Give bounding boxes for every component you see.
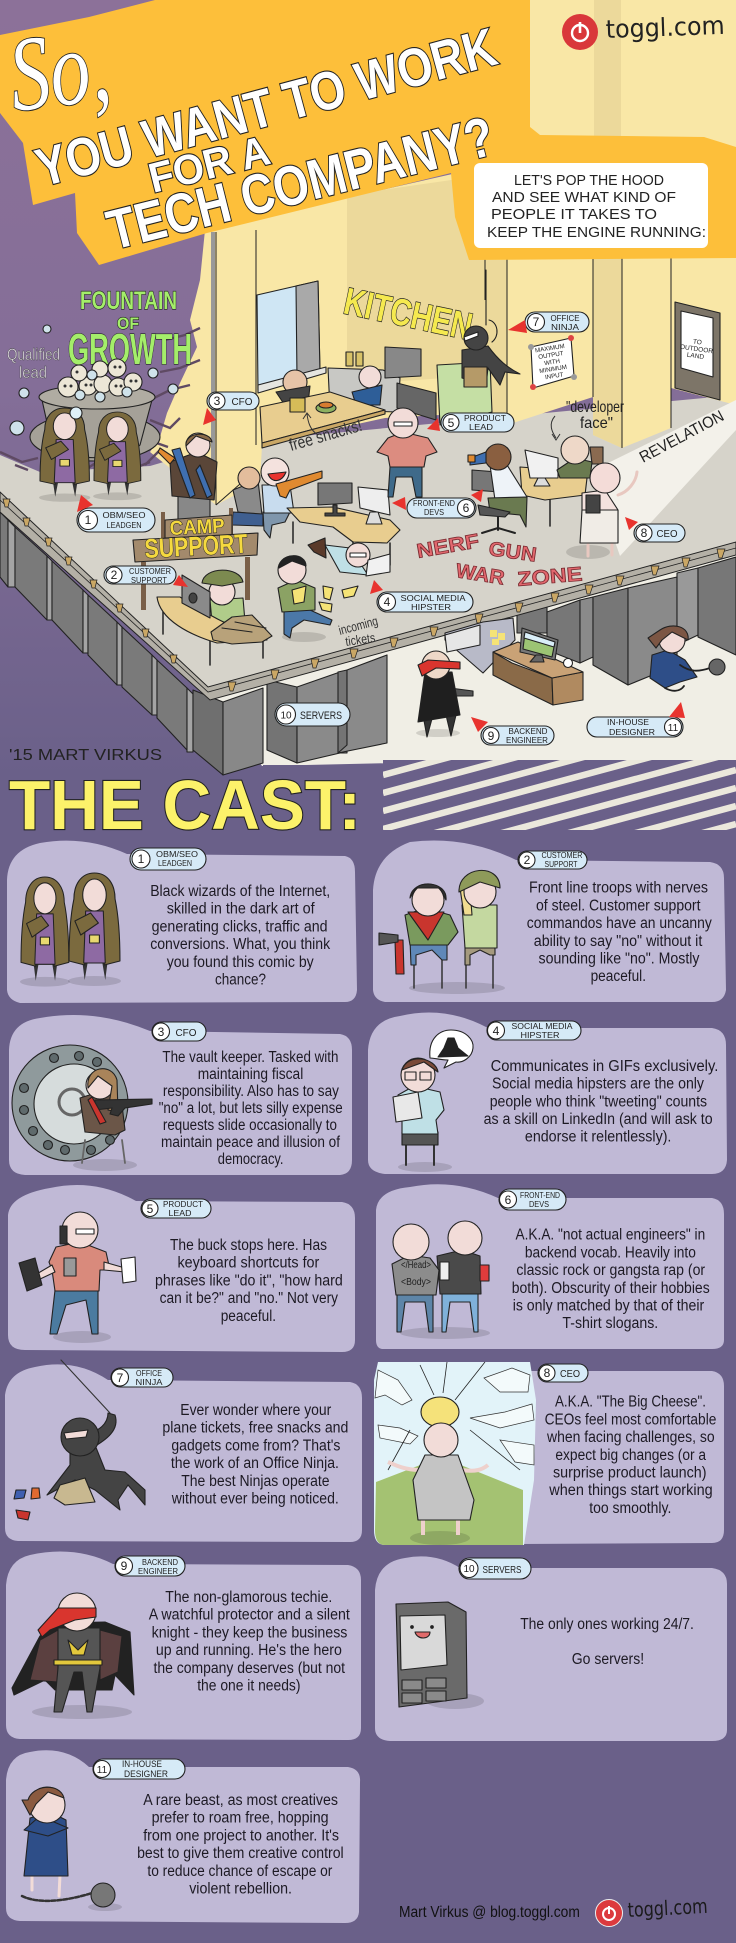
toggl logo bottom: toggl.com <box>627 1894 708 1922</box>
title: tech company: TECH COMPANY? <box>101 104 500 262</box>
text: skilled in the dark art of <box>167 901 315 918</box>
arrow <box>77 495 93 512</box>
panel: in-house designer <box>6 1750 360 1923</box>
product lead character <box>19 1212 136 1343</box>
text: Black wizards of the Internet, <box>150 883 330 900</box>
panel: CEO <box>374 1362 724 1545</box>
wizards <box>20 873 121 987</box>
support characters <box>379 870 505 994</box>
label: 11 <box>97 1765 108 1776</box>
dev characters: <Body> <box>401 1277 431 1288</box>
panel: social media hipster <box>368 1012 727 1174</box>
text: requests slide occasionally to <box>163 1117 337 1134</box>
label: CFO <box>176 1027 196 1039</box>
text: The vault keeper. Tasked with <box>162 1049 338 1066</box>
designer label: 11 <box>668 723 679 734</box>
designer label <box>587 717 683 737</box>
text: can it be?" and "no." Not very <box>160 1290 338 1307</box>
nerf gun war zone: ZONE <box>517 563 583 591</box>
kitchen counter and appliances <box>328 347 492 425</box>
fountain of growth heading <box>68 287 192 374</box>
text: The buck stops here. Has <box>170 1237 327 1254</box>
panel: backend engineer <box>6 1552 361 1740</box>
label <box>141 1199 211 1218</box>
text: The best Ninjas operate <box>181 1473 330 1490</box>
server racks right <box>517 557 736 685</box>
text: The non-glamorous techie. <box>165 1589 332 1606</box>
developer face note <box>551 399 625 440</box>
intro text box: AND SEE WHAT KIND OF <box>492 190 676 206</box>
CEO picture <box>374 1362 536 1545</box>
text: expect big changes (or a <box>555 1447 706 1464</box>
kitchen table with snacks <box>260 366 385 448</box>
qualified lead note: Qualified <box>7 345 60 364</box>
arrow <box>203 408 216 425</box>
label <box>115 1556 185 1576</box>
hipster character <box>393 1030 473 1172</box>
text: maintaining fiscal <box>198 1066 303 1083</box>
motivational sign <box>528 335 577 390</box>
servers label <box>275 703 350 726</box>
label <box>518 851 587 869</box>
ninja character <box>14 1360 145 1520</box>
motivational sign: MAXIMUM <box>535 343 565 354</box>
label: 10 <box>463 1564 475 1575</box>
nerf gun war zone: GUN <box>487 538 538 567</box>
customer support label: CUSTOMER <box>129 566 171 576</box>
label: SUPPORT <box>544 860 578 869</box>
label <box>111 1368 173 1387</box>
text: is only matched by that of their <box>513 1298 704 1314</box>
arrow <box>625 517 638 530</box>
label: OBM/SEO <box>156 849 198 859</box>
arrow <box>370 580 383 594</box>
arrow <box>392 497 406 510</box>
qualified lead note: lead <box>19 363 47 382</box>
text <box>159 1049 343 1168</box>
fountain <box>10 325 178 461</box>
label: DEVS <box>529 1200 549 1209</box>
customer support label <box>104 566 176 585</box>
label: 6 <box>505 1193 512 1207</box>
panel: product lead <box>8 1185 355 1352</box>
label: SERVERS <box>482 1564 522 1576</box>
label: 7 <box>117 1371 124 1385</box>
office ninja label: 7 <box>533 315 540 329</box>
server character <box>396 1602 484 1709</box>
free snacks note: free snacks! <box>287 416 364 455</box>
office ninja label: NINJA <box>551 322 579 332</box>
label <box>459 1558 531 1579</box>
credit: Mart Virkus @ blog.toggl.com <box>399 1904 580 1921</box>
toggl logo top <box>562 11 725 50</box>
developer face note: "developer <box>566 399 625 416</box>
office ninja label: OFFICE <box>550 313 580 323</box>
title <box>3 6 503 262</box>
designer label: IN-HOUSE <box>607 717 649 727</box>
text: knight - they keep the business <box>152 1624 348 1641</box>
text <box>150 883 330 988</box>
label: LEADGEN <box>158 858 192 868</box>
fountain of growth heading: OF <box>117 314 139 333</box>
door <box>675 302 720 400</box>
text: from one project to another. It's <box>143 1827 339 1844</box>
text: Communicates in GIFs exclusively. <box>491 1058 718 1075</box>
dev characters: </Head> <box>401 1260 431 1271</box>
designer character <box>22 1787 122 1911</box>
text: prefer to roam free, hopping <box>152 1810 329 1827</box>
label <box>538 1364 588 1382</box>
arrow <box>427 418 440 431</box>
panel: servers <box>375 1556 727 1741</box>
wall edge lines <box>213 230 671 505</box>
label: 2 <box>524 853 531 867</box>
servers label: 10 <box>280 710 292 722</box>
text: the work of an Office Ninja. <box>171 1455 339 1472</box>
text: surprise product launch) <box>553 1464 706 1482</box>
lower floor <box>207 548 736 766</box>
text: keyboard shortcuts for <box>178 1255 319 1272</box>
backend label: ENGINEER <box>506 735 548 745</box>
front-end label <box>407 498 476 518</box>
text <box>137 1792 344 1898</box>
wall <box>150 0 736 505</box>
door: OUTDOOR <box>679 344 714 355</box>
text: maintain peace and illusion of <box>161 1134 341 1151</box>
front-end label: FRONT-END <box>413 498 455 508</box>
label: IN-HOUSE <box>122 1759 162 1770</box>
label: OFFICE <box>136 1368 162 1378</box>
product lead label: PRODUCT <box>464 413 506 423</box>
title: So: So, <box>3 6 116 134</box>
CFO label <box>207 392 259 410</box>
qualified lead note <box>7 345 60 382</box>
label: SOCIAL MEDIA <box>512 1021 573 1031</box>
label: NINJA <box>136 1377 163 1387</box>
text: responsibility. Also has to say <box>163 1083 339 1100</box>
servers label: SERVERS <box>300 710 342 722</box>
developer face note: face" <box>580 415 613 432</box>
label: PRODUCT <box>163 1199 203 1209</box>
customer support label: 2 <box>111 568 118 582</box>
social media label: SOCIAL MEDIA <box>400 593 466 603</box>
platform edge <box>0 492 736 700</box>
tickets guy <box>278 556 358 642</box>
incoming tickets note: incoming <box>337 613 379 638</box>
camp support sign: CAMP <box>169 515 225 540</box>
motivational sign: MINIMUM <box>539 364 567 375</box>
office floor <box>0 395 736 687</box>
product lead label: 5 <box>448 416 455 430</box>
label: 4 <box>493 1024 500 1038</box>
label: BACKEND <box>142 1557 178 1567</box>
OBM label: 1 <box>85 513 92 527</box>
fountain of growth heading: GROWTH <box>68 325 192 374</box>
intro text box: KEEP THE ENGINE RUNNING: <box>487 225 706 241</box>
customer support label: SUPPORT <box>131 575 167 585</box>
text: Social media hipsters are the only <box>492 1076 704 1093</box>
vault with CFO <box>12 1045 152 1171</box>
arrow <box>471 717 488 732</box>
CFO scene <box>158 433 217 520</box>
camp support sign <box>133 508 258 610</box>
text: peaceful. <box>221 1308 276 1325</box>
panel: customer support <box>373 840 726 1002</box>
text: conversions. What, you think <box>150 936 330 953</box>
backend character <box>12 1593 134 1719</box>
motivational sign: WITH <box>544 358 560 367</box>
door: TO <box>692 338 702 347</box>
text: The only ones working 24/7. <box>520 1616 694 1633</box>
incoming tickets note <box>337 613 379 649</box>
text: T-shirt slogans. <box>562 1315 658 1332</box>
text: too smoothly. <box>589 1500 671 1517</box>
backend label <box>481 726 554 745</box>
backend label: 9 <box>488 729 495 743</box>
text: A watchful protector and a silent <box>149 1607 350 1624</box>
text: backend vocab. Heavily into <box>525 1244 696 1261</box>
text: the one it needs) <box>197 1678 300 1694</box>
front-end label: DEVS <box>424 507 444 517</box>
wall shading <box>347 0 622 448</box>
title banner <box>0 0 736 265</box>
text <box>484 1058 718 1146</box>
text: you found this comic by <box>167 954 314 971</box>
motivational sign: INPUT <box>545 371 564 381</box>
label: DESIGNER <box>124 1769 168 1780</box>
text: both). Obscurity of their hobbies <box>512 1280 710 1297</box>
text: democracy. <box>218 1151 284 1168</box>
text: to reduce chance of escape or <box>147 1863 332 1880</box>
CEO label <box>634 524 685 542</box>
label: CUSTOMER <box>542 851 583 860</box>
text <box>512 1227 710 1332</box>
designer with ball and chain <box>648 626 725 691</box>
text: without ever being noticed. <box>171 1490 339 1508</box>
text: classic rock or gangsta rap (or <box>516 1262 705 1279</box>
label <box>93 1759 185 1780</box>
signature: '15 MART VIRKUS <box>9 747 162 764</box>
title: for a: FOR A <box>144 126 275 202</box>
text: chance? <box>215 972 266 988</box>
text: A.K.A. "not actual engineers" in <box>516 1227 705 1244</box>
text: commandos have an uncanny <box>527 915 712 932</box>
incoming tickets note: tickets <box>344 630 377 649</box>
panel: office ninja <box>5 1360 362 1542</box>
label: HIPSTER <box>520 1030 560 1040</box>
text: as a skill on LinkedIn (and will ask to <box>484 1111 713 1128</box>
shooters <box>232 458 322 538</box>
label: 9 <box>121 1559 128 1573</box>
nerf gun war zone: NERF <box>415 530 481 563</box>
text: Front line troops with nerves <box>529 880 708 897</box>
camp support sign: SUPPORT <box>144 529 249 564</box>
label: 1 <box>138 852 145 866</box>
label <box>499 1189 566 1210</box>
nerf gun war zone: WAR <box>454 560 507 590</box>
text: violent rebellion. <box>189 1880 292 1898</box>
text: peaceful. <box>591 968 646 985</box>
text: best to give them creative control <box>137 1845 344 1862</box>
text: gadgets come from? That's <box>171 1437 341 1454</box>
label: 3 <box>158 1025 165 1039</box>
product lead <box>377 408 437 497</box>
text: A rare beast, as most creatives <box>143 1792 338 1809</box>
text: ability to say "no" without it <box>534 933 703 950</box>
intro text box: PEOPLE IT TAKES TO <box>491 207 657 223</box>
panel: OBM/SEO leadgen <box>7 841 357 1003</box>
product lead label: LEAD <box>469 422 493 432</box>
CEO scene <box>566 463 637 559</box>
OBM wizards <box>39 407 142 502</box>
label: 5 <box>147 1202 154 1216</box>
label <box>152 1022 206 1041</box>
toggl logo bottom <box>596 1894 708 1926</box>
OBM label: LEADGEN <box>106 520 142 530</box>
arrow <box>669 702 685 718</box>
intro text box <box>474 163 708 248</box>
text: sounding like "no". Mostly <box>538 950 700 968</box>
arrow <box>173 575 188 587</box>
backend engineer <box>416 651 473 737</box>
revelation beam <box>590 400 736 556</box>
CEO label: 8 <box>641 526 648 540</box>
OBM label <box>77 508 155 532</box>
text: phrases like "do it", "how hard <box>155 1272 343 1289</box>
intro text box: LET'S POP THE HOOD <box>514 173 664 189</box>
text: when things start working <box>548 1482 713 1499</box>
panel: CFO <box>9 1015 352 1175</box>
text: up and running. He's the hero <box>156 1642 342 1659</box>
text: when facing challenges, so <box>546 1429 715 1446</box>
label <box>130 848 206 870</box>
panel: front-end devs <box>376 1184 724 1349</box>
text: generating clicks, traffic and <box>152 918 328 935</box>
window <box>257 281 326 393</box>
social media label: 4 <box>384 595 391 609</box>
text <box>527 880 712 985</box>
text: people who think "tweeting" counts <box>490 1093 707 1110</box>
arrow <box>508 320 527 333</box>
fountain of growth heading: FOUNTAIN <box>80 287 177 315</box>
desk and computers <box>287 483 400 565</box>
hipster under desk <box>308 538 390 576</box>
text: plane tickets, free snacks and <box>162 1420 348 1437</box>
nerf gun war zone <box>415 530 583 591</box>
label <box>487 1021 581 1040</box>
text: "no" a lot, but lets silly expense <box>159 1100 343 1117</box>
motivational sign: OUTPUT <box>538 350 564 361</box>
OBM label: OBM/SEO <box>102 510 146 520</box>
designer label: DESIGNER <box>609 727 655 737</box>
text: of steel. Customer support <box>536 897 701 914</box>
label: FRONT-END <box>520 1191 560 1200</box>
backend label: BACKEND <box>508 726 548 736</box>
CEO label: CEO <box>656 528 678 540</box>
text: the company deserves (but not <box>154 1660 346 1677</box>
kitchen sign: KITCHEN <box>340 281 476 349</box>
server racks left <box>0 512 263 775</box>
dev characters <box>392 1221 490 1339</box>
text <box>520 1616 694 1668</box>
CFO label: CFO <box>232 397 253 408</box>
text <box>155 1237 343 1325</box>
heading: the cast: THE CAST: <box>9 766 361 844</box>
stripes <box>383 760 736 830</box>
front-end devs at desks <box>468 436 603 533</box>
text: A.K.A. "The Big Cheese". <box>555 1394 706 1411</box>
text <box>545 1394 716 1517</box>
label: LEAD <box>168 1208 192 1218</box>
CFO label: 3 <box>214 394 221 408</box>
band below scene <box>263 765 383 833</box>
filing cabinet and desk <box>445 618 583 705</box>
social media label: HIPSTER <box>411 602 451 612</box>
door: LAND <box>686 352 705 361</box>
office ninja label <box>525 312 589 332</box>
label: CEO <box>560 1369 580 1380</box>
arrow <box>471 489 483 502</box>
server racks centre <box>267 655 387 763</box>
cracks around fountain <box>0 328 200 470</box>
text: Go servers! <box>572 1651 644 1668</box>
front-end label: 6 <box>463 501 470 515</box>
text: endorse it relentlessly). <box>525 1129 671 1146</box>
text: CEOs feel most comfortable <box>545 1411 716 1428</box>
text: Ever wonder where your <box>180 1402 331 1419</box>
office ninja <box>462 270 520 387</box>
product lead label <box>441 413 514 432</box>
toggl logo top: toggl.com <box>605 11 725 44</box>
text <box>162 1402 348 1508</box>
label: 8 <box>544 1366 551 1380</box>
revelation beam: REVELATION <box>637 408 727 467</box>
social media label <box>377 592 473 612</box>
text <box>149 1589 350 1694</box>
customer support station <box>157 570 272 665</box>
label: ENGINEER <box>138 1566 178 1576</box>
